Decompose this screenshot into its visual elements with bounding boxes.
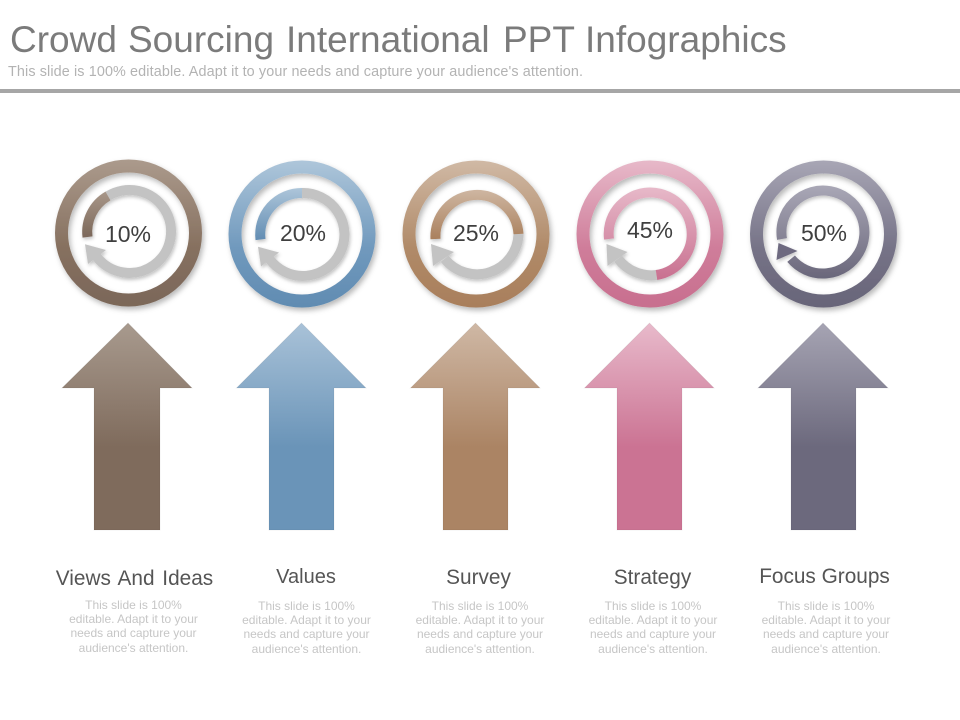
progress ring xyxy=(606,192,692,275)
description: needs and capture your xyxy=(243,627,370,641)
label: Strategy xyxy=(614,566,692,589)
description: editable. Adapt it to your xyxy=(762,613,890,627)
description: editable. Adapt it to your xyxy=(242,613,371,627)
progress ring xyxy=(776,191,864,274)
outer ring xyxy=(62,166,196,300)
title: International xyxy=(286,19,490,60)
description: This slide is 100% xyxy=(85,598,182,612)
arrow xyxy=(236,323,366,530)
outer ring xyxy=(756,167,890,301)
donut: 25% xyxy=(409,167,543,301)
description: needs and capture your xyxy=(763,627,889,641)
title: PPT xyxy=(503,19,574,60)
outer ring xyxy=(583,167,717,301)
description: This slide is 100% xyxy=(432,599,529,613)
title: Crowd xyxy=(10,19,117,60)
label: Focus Groups xyxy=(759,565,890,588)
arrow xyxy=(584,323,714,530)
description: editable. Adapt it to your xyxy=(589,613,717,627)
arrow xyxy=(410,323,540,530)
label: Values xyxy=(276,566,336,588)
subtitle: This slide is 100% editable. Adapt it to your needs and capture your audience's attention. xyxy=(8,64,583,80)
donut: 10% xyxy=(62,166,196,300)
description: audience's attention. xyxy=(771,642,881,656)
description: editable. Adapt it to your xyxy=(416,613,544,627)
panel: values xyxy=(235,167,371,656)
donut: 20% xyxy=(235,167,369,301)
value: 50% xyxy=(801,220,847,246)
progress ring xyxy=(85,190,171,273)
panel: focus groups xyxy=(756,167,890,656)
outer ring xyxy=(235,167,369,301)
value: 25% xyxy=(453,220,499,246)
panel: strategy xyxy=(583,167,717,656)
arrow xyxy=(758,323,888,530)
description: audience's attention. xyxy=(598,642,708,656)
donut: 45% xyxy=(583,167,717,301)
donut: 50% xyxy=(756,167,890,301)
label: Survey xyxy=(446,566,511,589)
progress ring xyxy=(431,195,518,274)
description: audience's attention. xyxy=(79,641,188,655)
value: 45% xyxy=(627,217,673,243)
progress ring xyxy=(258,193,344,276)
label: Views And Ideas xyxy=(56,567,213,590)
description: This slide is 100% xyxy=(778,599,875,613)
description: This slide is 100% xyxy=(258,599,355,613)
value: 20% xyxy=(280,220,326,246)
description: editable. Adapt it to your xyxy=(69,612,198,626)
description: audience's attention. xyxy=(252,642,361,656)
title: Infographics xyxy=(585,19,787,60)
description: needs and capture your xyxy=(417,627,543,641)
outer ring xyxy=(409,167,543,301)
description: This slide is 100% xyxy=(605,599,702,613)
title: Sourcing xyxy=(128,19,274,60)
panel: views and ideas xyxy=(56,166,213,655)
panel: survey xyxy=(409,167,544,656)
value: 10% xyxy=(105,221,151,247)
description: audience's attention. xyxy=(425,642,535,656)
description: needs and capture your xyxy=(70,626,197,640)
description: needs and capture your xyxy=(590,627,716,641)
arrow xyxy=(62,323,192,530)
